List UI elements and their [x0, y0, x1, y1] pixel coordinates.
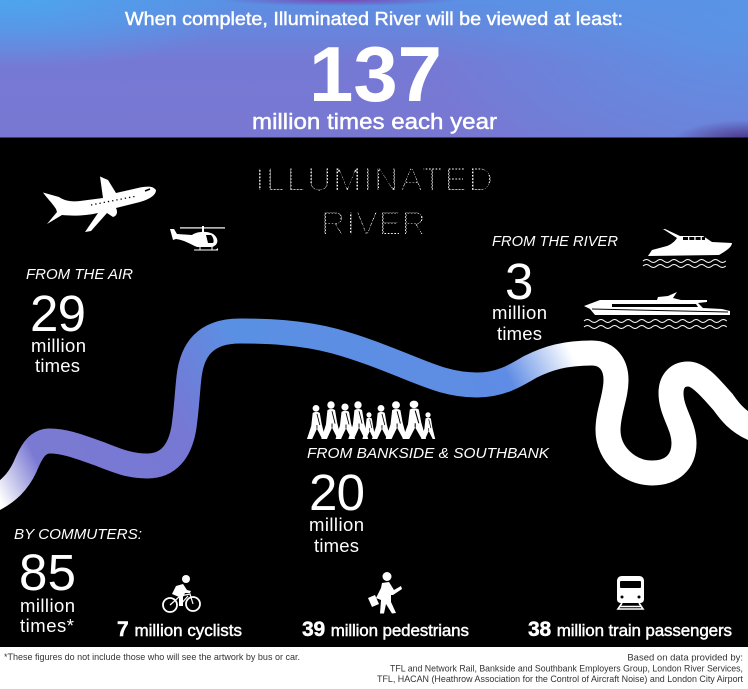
from the river stat: million [492, 302, 547, 323]
by commuters stat: 85 [19, 544, 76, 601]
by commuters stat: million [20, 595, 75, 616]
icon: crowd of people [307, 401, 435, 439]
icon: yacht [643, 229, 732, 268]
footnote: *These figures do not include those who will see the artwork by bus or car. [4, 652, 300, 663]
from the river stat [492, 233, 618, 344]
title: Illuminated River dotted: RIVER [321, 205, 426, 243]
header line: When complete, Illuminated River will be viewed at least: [125, 9, 623, 29]
from bankside and southbank stat [307, 445, 550, 556]
icon: helicopter [170, 226, 225, 250]
from bankside and southbank stat: 20 [309, 464, 365, 521]
header panel [0, 0, 748, 138]
from the air stat: 29 [30, 285, 86, 342]
icon: pedestrian with bag [368, 572, 402, 614]
from the air stat: million [31, 335, 86, 356]
source credits: Based on data provided by: [627, 652, 743, 664]
icon: ferry [584, 292, 730, 328]
from the air stat: FROM THE AIR [26, 266, 133, 283]
stat: train passengers: 38 million train passengers [528, 618, 732, 641]
icon: train [617, 576, 644, 609]
from the river stat: times [497, 323, 542, 344]
stat: cyclists: 7 million cyclists [117, 618, 242, 641]
from bankside and southbank stat: times [314, 535, 359, 556]
from bankside and southbank stat: FROM BANKSIDE & SOUTHBANK [307, 445, 550, 462]
from the air stat: times [35, 355, 80, 376]
icon: plane [43, 176, 156, 232]
river [0, 331, 748, 500]
from bankside and southbank stat: million [309, 514, 364, 535]
by commuters stat: times* [20, 615, 74, 636]
title: Illuminated River dotted: ILLUMINATED [255, 161, 493, 199]
headline unit: million times each year [252, 109, 497, 134]
headline number: 137 [309, 30, 442, 118]
from the air stat [26, 266, 133, 376]
source credits [377, 652, 743, 685]
from the river stat: 3 [505, 253, 533, 310]
stat: pedestrians: 39 million pedestrians [302, 618, 469, 641]
title: Illuminated River dotted [259, 168, 490, 234]
icon: cyclist [163, 575, 200, 612]
by commuters stat [14, 526, 142, 636]
by commuters stat: BY COMMUTERS: [14, 526, 142, 543]
from the river stat: FROM THE RIVER [492, 233, 618, 250]
black background panel [0, 137, 748, 647]
